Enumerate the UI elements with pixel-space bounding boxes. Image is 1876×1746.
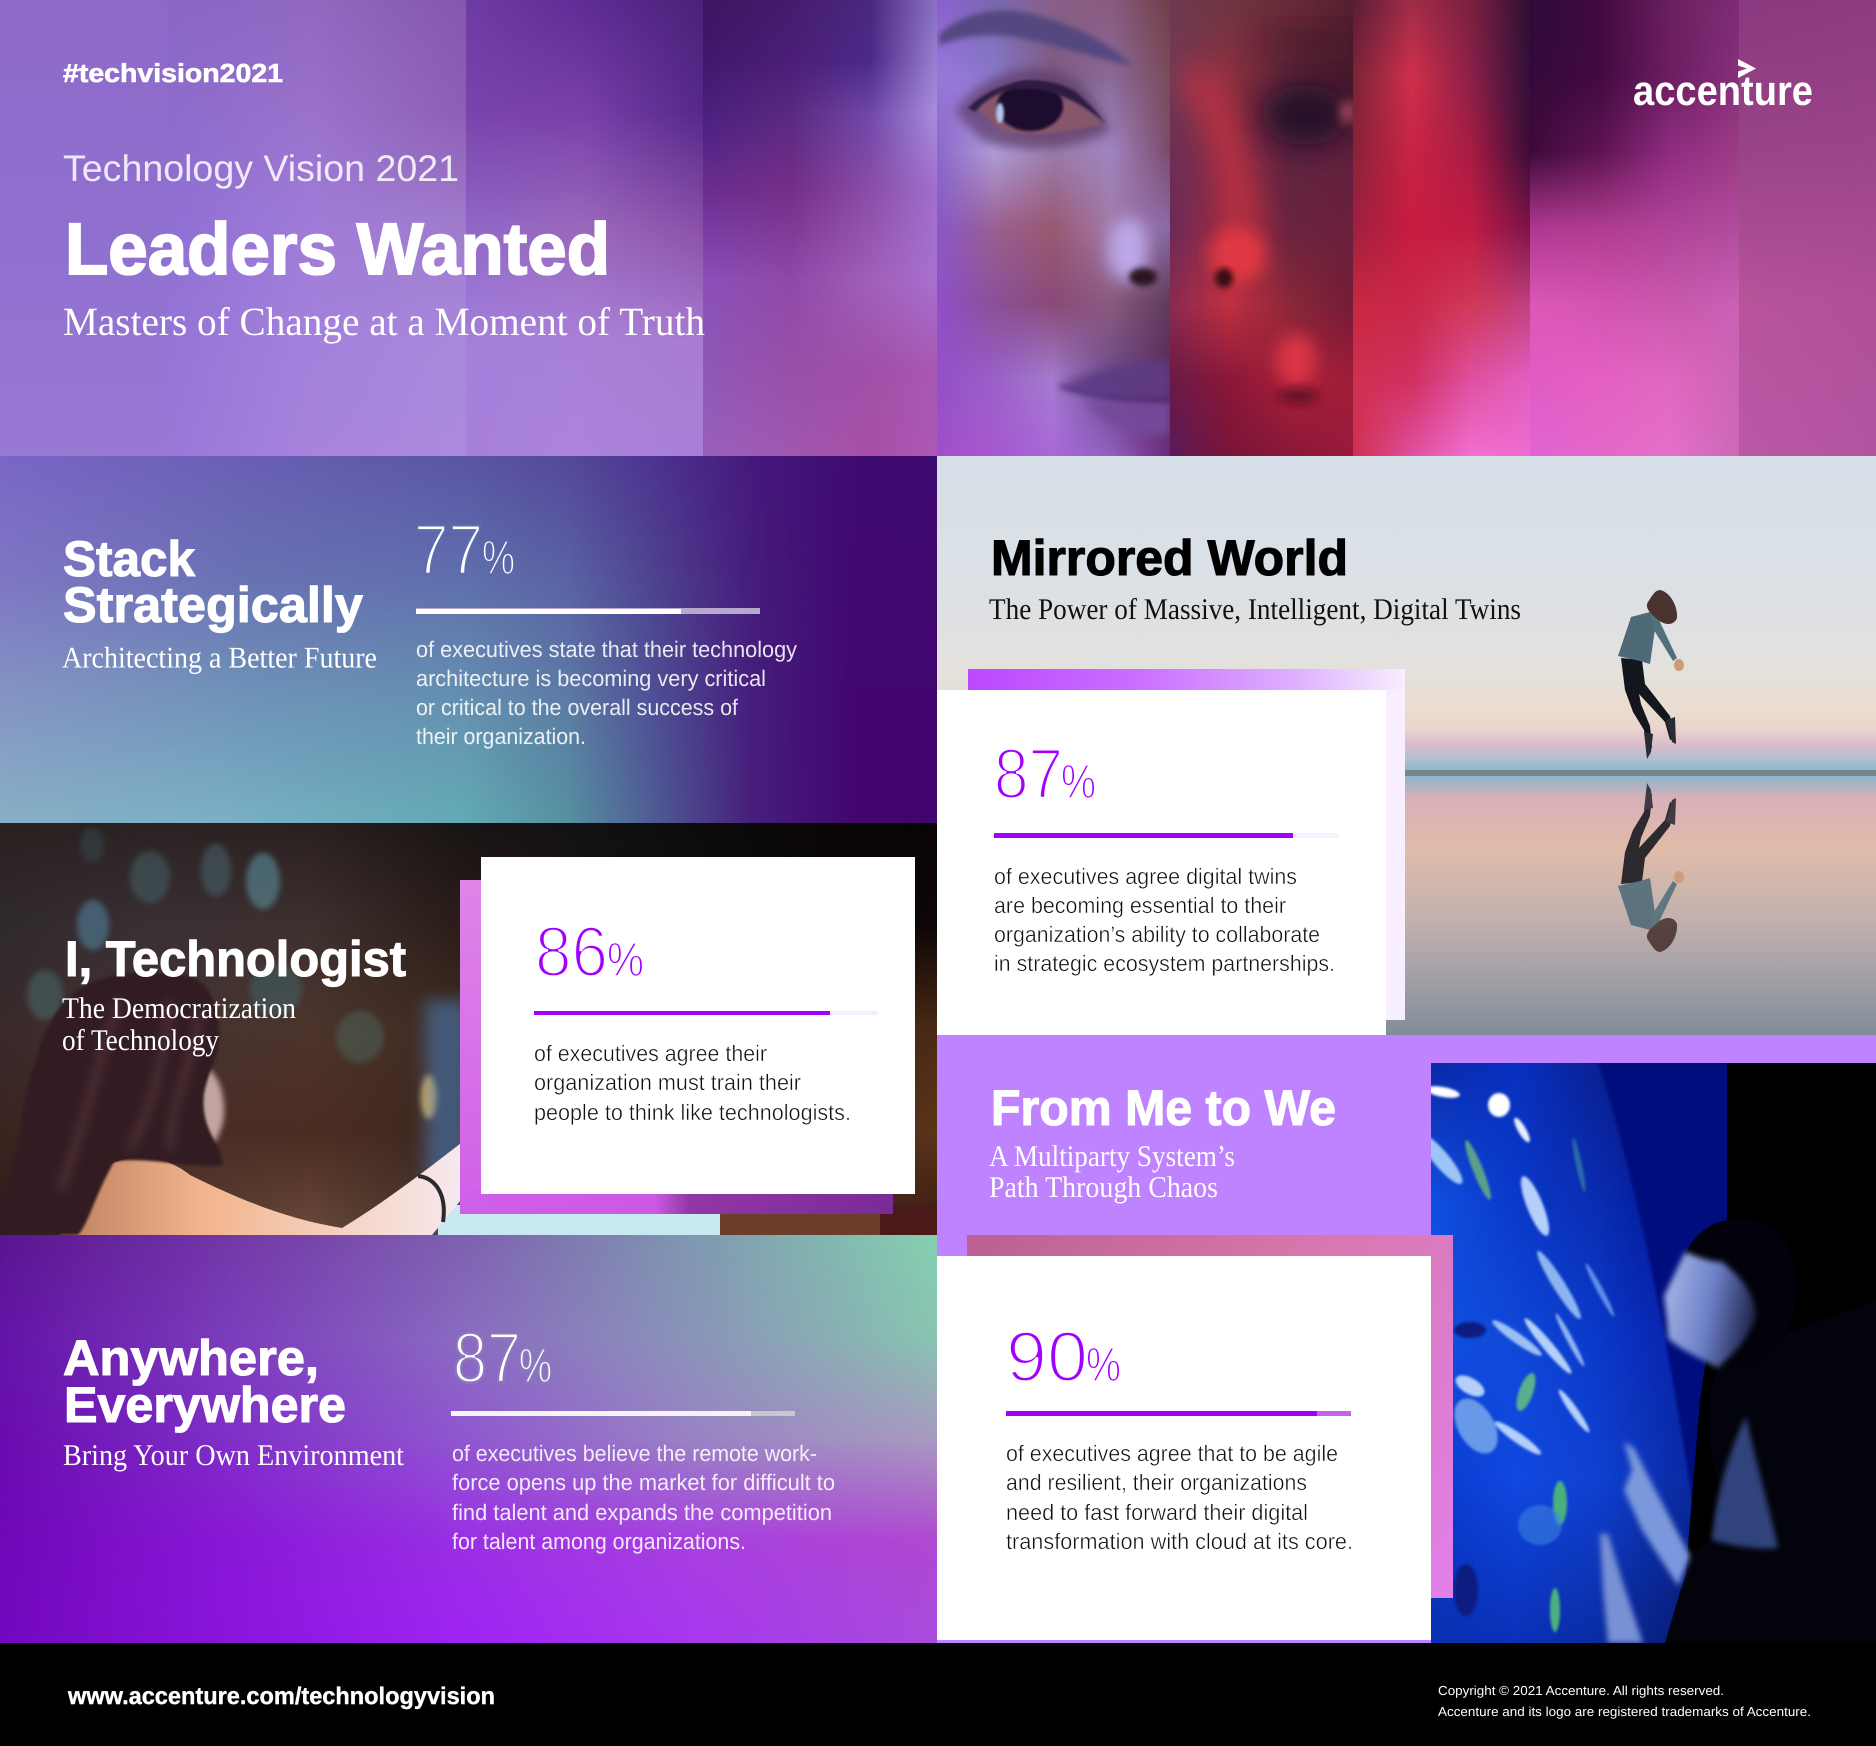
stat: 87%: % [1061,756,1096,809]
nostril [1129,268,1157,286]
stat description: need to fast forward their digital [1006,1500,1308,1525]
logo chevron [1738,59,1756,78]
gradient strip: dark to pink [1530,0,1739,456]
stat description: their organization. [416,724,586,749]
shoes [1644,717,1676,759]
eye white [975,85,1102,134]
stat: 86%: 86 [535,913,608,992]
heading [63,531,363,633]
stat: 90%: 90 [1006,1318,1088,1397]
figure reflection [1618,783,1684,952]
bokeh lights [27,827,437,1119]
raised hand [1624,1442,1690,1586]
woman's body [1665,1300,1876,1643]
photo base: blurred red half of face [1170,0,1353,456]
panel: hero portrait with accenture logo [937,0,1876,456]
hashtag: #techvision2021 [63,58,283,88]
facial features: sharp side [937,8,1170,438]
gradient strip: red to dark [1353,0,1530,456]
stat description: of executives agree digital twins [994,864,1297,889]
blurred mouth [1278,388,1318,404]
iris [997,81,1063,131]
blurred brow [1260,30,1360,54]
woman's face [1664,1252,1755,1368]
subheading [62,992,296,1057]
gradient strip 4 [703,0,937,456]
photo: aquarium [1431,1063,1876,1643]
panel: From Me to We [937,1035,1876,1643]
stat: 90%: % [1086,1339,1121,1392]
white stat card [481,857,915,1194]
lower lip [1085,400,1170,435]
title: Leaders Wanted: Leaders Wanted [65,209,610,290]
panel gradient background [0,456,937,823]
gradient strip 2 [167,0,466,456]
dark panel right [880,1205,937,1235]
hair highlights [60,1000,200,1190]
panel gradient background [0,1235,937,1643]
stat description: of executives state that their technology [416,637,798,662]
second hand [1600,1534,1643,1643]
stat description [994,864,1335,976]
nose highlight [1108,218,1148,282]
logo wordmark: accenture [1633,67,1813,114]
upper lid [968,81,1106,124]
gradient strip 1 [0,0,167,456]
heading [63,1330,346,1433]
stat: 90% [1006,1318,1121,1397]
stat: 87%: 87 [453,1319,521,1398]
gradient strip 3 [466,0,703,456]
heading: Everywhere [64,1377,346,1433]
stat: 77%: % [482,532,515,585]
wristband [418,1176,444,1222]
subheading: Path Through Chaos [989,1171,1218,1204]
stat description: of executives agree that to be agile [1006,1441,1338,1466]
card shadow [460,880,893,1214]
stat: 87%: % [519,1340,552,1393]
stat description [534,1041,851,1125]
panel: Anywhere, Everywhere [0,1235,937,1643]
subtitle: Masters of Change at a Moment of Truth [63,299,705,344]
jumping figure [1618,590,1684,759]
facial features: blurred side [1172,30,1353,408]
accenture logo [1633,59,1813,114]
head and hair [1647,590,1677,624]
stat description: or critical to the overall success of [416,695,739,720]
stat description [1006,1441,1353,1554]
heading: Stack [63,531,195,587]
blue light behind card [425,1000,470,1235]
stat: 86%: % [607,934,644,987]
subheading: A Multiparty System’s [989,1140,1235,1173]
blurred eye glint [1340,100,1356,124]
eyebrow: Technology Vision 2021: Technology Vision 2021 [63,148,459,189]
copyright notice: Accenture and its logo are registered trademarks of Accenture. [1438,1704,1811,1719]
white stat card [937,690,1386,1035]
stat description: people to think like technologists. [534,1100,851,1125]
subheading: The Democratization [62,992,296,1025]
website url: www.accenture.com/technologyvision [67,1683,495,1710]
subheading: of Technology [62,1024,219,1057]
blurred nostril [1215,268,1233,288]
light floor below card [438,1205,720,1235]
black background [1680,1062,1876,1643]
stat description: are becoming essential to their [994,893,1286,918]
subheading: The Power of Massive, Intelligent, Digital Twins [989,593,1521,626]
progress bar 87 [451,1411,795,1416]
panel: hero header [0,0,937,456]
red nose tip [1210,227,1266,283]
red lip spot [1276,334,1316,386]
eye socket [955,69,1110,149]
panel: I, Technologist [0,823,937,1235]
mouth line [1060,386,1170,400]
subheading [989,1140,1235,1204]
clothing pattern [1712,1416,1778,1549]
card shadow right band [1386,690,1405,1020]
stat description [416,637,798,749]
warm panel right [720,1205,880,1235]
card shadow [967,1235,1453,1598]
stat description: transformation with cloud at its core. [1006,1529,1353,1554]
upper lip [1060,362,1170,398]
heading: From Me to We [991,1080,1336,1136]
heading: Anywhere, [63,1330,319,1386]
face sliver [194,1060,224,1145]
card shadow [968,669,1405,1020]
heading: Strategically [63,577,363,633]
stat description: in strategic ecosystem partnerships. [994,951,1335,976]
progress bar 86 [534,1011,878,1015]
fish [1414,1084,1617,1632]
dark glass area [1598,1062,1876,1643]
photo: sky and salt flat [937,456,1876,1035]
subheading: Architecting a Better Future [62,642,377,674]
hand [1674,659,1684,671]
copyright notice: Copyright © 2021 Accenture. All rights reserved. [1438,1683,1724,1698]
eye reflection [996,103,1004,123]
stat description: force opens up the market for difficult to [452,1470,835,1495]
copyright notice [1438,1683,1811,1719]
footer bar [0,1643,1876,1746]
panel: Mirrored World [937,456,1876,1035]
jacket [1618,612,1656,664]
subheading: Bring Your Own Environment [63,1439,405,1472]
photo base: aquarium water [1431,1063,1727,1643]
panel: Stack Strategically [0,456,937,823]
stat description [452,1441,835,1554]
shoulder and arm [60,1140,465,1235]
blurred eye [1261,85,1349,145]
stat description: architecture is becoming very critical [416,666,766,691]
photo base: sharp half of face [937,0,1170,456]
arm [1650,613,1677,661]
stat description: of executives believe the remote work- [452,1441,817,1466]
stat description: find talent and expands the competition [452,1500,832,1525]
legs [1621,658,1675,748]
stat description: organization’s ability to collaborate [994,922,1320,947]
progress bar 87 [994,833,1338,838]
stat: 77%: 77 [414,511,483,590]
hair [0,972,222,1235]
eyebrow [939,10,1132,66]
stat description: organization must train their [534,1070,801,1095]
stat description: and resilient, their organizations [1006,1470,1307,1495]
photo: background bokeh [0,823,937,1235]
stat description: for talent among organizations. [452,1529,746,1554]
woman's hair [1685,1219,1796,1370]
red nose bridge [1192,70,1246,235]
progress bar 90 [1006,1411,1351,1416]
stat description: of executives agree their [534,1041,767,1066]
heading: I, Technologist [65,931,406,987]
heading: Mirrored World [991,530,1348,586]
gradient strip: magenta edge [1739,0,1876,456]
horizon line [937,770,1876,776]
stat: 87%: 87 [994,735,1063,814]
white stat card [937,1256,1431,1640]
progress bar 77 [416,608,760,614]
